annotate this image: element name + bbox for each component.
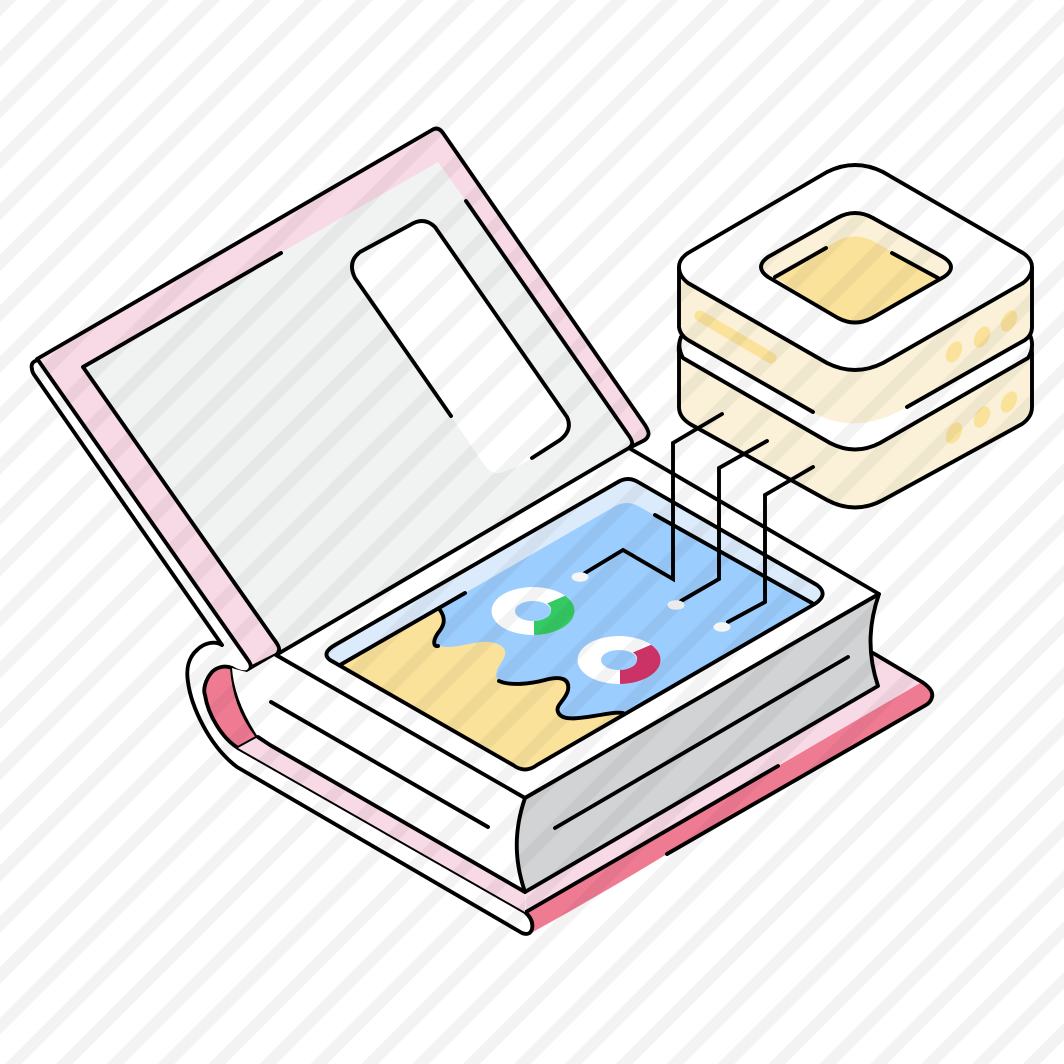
open cover: [32, 129, 649, 672]
tray background: [326, 479, 823, 770]
database server stack: [679, 165, 1032, 508]
cover: white label panel: [352, 221, 569, 473]
status bar: [700, 316, 771, 358]
wire 2: [681, 441, 767, 601]
back cover: lower right: [525, 653, 932, 932]
status lights: lower: [942, 389, 1021, 446]
top recess: sand panel: [775, 236, 938, 322]
page block: [232, 448, 879, 892]
front cover: pink strip under the pages: [238, 737, 525, 912]
spine hinge: red crescent: [204, 667, 258, 748]
page block: front pages: [232, 655, 525, 892]
spine of the book: [187, 643, 532, 934]
water: [340, 503, 812, 770]
page block: top face: [276, 448, 879, 798]
page block: text lines: [271, 657, 848, 828]
donut chart: green: [492, 587, 574, 635]
lower server block: [679, 337, 1032, 508]
wire endpoints: [572, 572, 730, 632]
connector wires: [572, 414, 813, 632]
map tray on the page: [326, 479, 823, 770]
wire 1: [585, 414, 722, 579]
page block: gray fore edge: [517, 594, 879, 892]
land: [340, 610, 623, 770]
upper block top face: [679, 165, 1032, 370]
status lights: upper: [942, 308, 1021, 365]
wire 3: [728, 467, 813, 622]
donut chart: crimson: [578, 636, 660, 684]
lower block top face: [679, 335, 1032, 450]
cover: pink board: [37, 129, 649, 672]
top recess: [761, 213, 951, 322]
tray outline: [326, 479, 823, 770]
cover: white spine sliver: [32, 360, 248, 672]
cover: inner gray page: [83, 162, 632, 655]
upper block side: [679, 267, 1032, 423]
coastline: [434, 610, 623, 718]
